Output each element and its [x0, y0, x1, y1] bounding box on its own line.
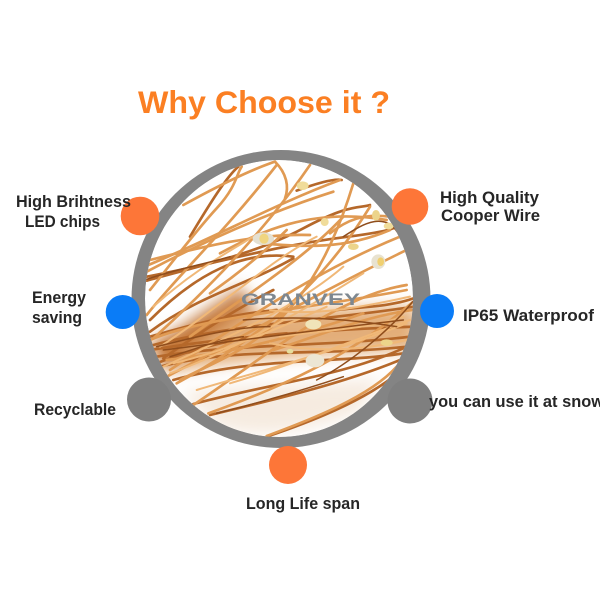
label: high brightness LED chips: High Brihtness	[16, 193, 131, 211]
watermark: GRANVEY	[241, 290, 361, 309]
label: long life span: Long Life span	[246, 495, 360, 513]
LED chips	[253, 181, 394, 367]
label: use at snow: you can use it at snow	[429, 393, 600, 411]
photo: copper wire lights	[145, 160, 417, 437]
dot: lower right gray	[388, 378, 432, 424]
wire group: deep brown lines	[147, 221, 413, 413]
wire group: dark copper	[147, 167, 413, 437]
label: energy saving: saving	[32, 309, 82, 327]
label: high brightness LED chips	[16, 193, 131, 231]
ring frame	[132, 150, 430, 448]
dot: lower left gray	[127, 378, 171, 422]
label: high quality copper wire: Cooper Wire	[441, 207, 540, 225]
label: high brightness LED chips: LED chips	[25, 213, 100, 231]
dot: bottom orange	[269, 446, 307, 484]
dot: right blue	[420, 294, 454, 328]
soft shadows and dense wire mass	[147, 287, 417, 433]
dot: left blue	[106, 295, 140, 329]
wire group: light copper	[147, 162, 413, 436]
label: recyclable: Recyclable	[34, 401, 116, 419]
label: IP65 waterproof: IP65 Waterproof	[463, 307, 595, 325]
dot: top right orange	[392, 188, 428, 225]
label: high quality copper wire: High Quality	[440, 189, 540, 207]
label: energy saving: Energy	[32, 289, 87, 307]
title: Why Choose it ?	[138, 84, 390, 120]
dot: top left orange	[121, 197, 159, 235]
wire group: pale highlights	[153, 237, 410, 390]
label: energy saving	[32, 289, 87, 327]
label: high quality copper wire	[440, 189, 540, 225]
